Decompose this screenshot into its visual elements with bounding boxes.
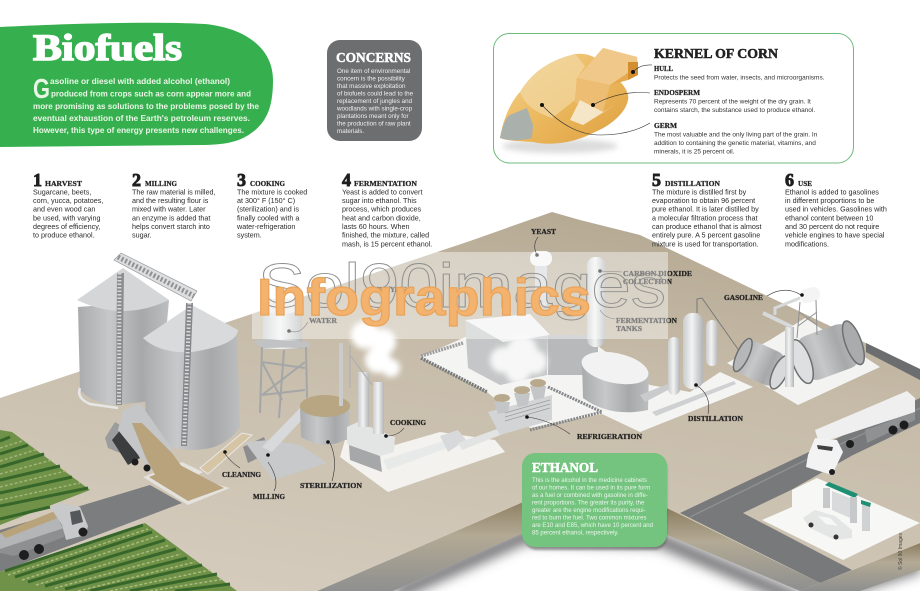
step 4: fermentation: 4 [342,170,351,190]
ground side strata [317,499,920,591]
step 1: harvest: degrees of efficiency, [33,222,100,231]
paved platform: gasoline [727,318,880,405]
title: Biofuels [33,28,182,69]
step 1: harvest: HARVEST [45,180,82,188]
endosperm [654,89,815,114]
milling unit [245,405,327,480]
steam from cooking [351,321,400,377]
road: main road and junction [680,343,920,583]
cooking unit [347,345,395,472]
kernel heading: KERNEL OF CORN [654,47,778,62]
germ: GERM [654,122,677,130]
silo front [143,305,240,450]
germ: The most valuable and the only living part of the grain. In [654,132,818,138]
truck on access road [0,503,88,560]
process labels: TANKS [616,325,642,333]
ethanol text: of our homes. It can be used in its pure form [532,486,650,492]
road: access road at the field [0,485,182,572]
process labels: STERILIZATION [300,482,362,490]
step 2: milling: mixed with water. Later [132,205,206,214]
step 3: cooking: COOKING [250,180,286,188]
ethanol text: as a fuel or combined with gasoline in diffe- [532,493,648,499]
hull: Protects the seed from water, insects, and microorganisms. [654,74,825,82]
step 1: harvest: 1 [33,170,42,190]
process labels: MILLING [253,493,286,501]
step 3: cooking: water-refrigeration [236,222,295,231]
panel: ethanol [522,453,667,550]
refrigeration unit [421,343,602,435]
step 6: use: used in vehicles. Gasolines with [785,205,887,214]
kernel illustration [500,48,638,153]
ground plane [0,212,920,591]
step 5: distillation: The mixture is distilled first by [652,187,747,196]
concerns text: One item of environmental [337,68,410,75]
watermark: Infographics: Infographics [257,269,591,327]
step 4: fermentation: Yeast is added to convert [342,187,422,196]
step 2: milling: The raw material is milled, [132,187,215,196]
watermark: Sol90images: Sol90images [258,252,666,321]
concerns text [336,68,414,135]
step 3: cooking: finally cooled with a [237,213,299,222]
storage tank [579,346,651,412]
distillation columns [640,298,740,416]
step 5: distillation [652,170,761,248]
ethanol text: greater are the engine modifications requi- [532,508,646,514]
step 6: use: Ethanol is added to gasolines [785,187,879,196]
step 3: cooking: 3 [237,170,246,190]
step 3: cooking: (sterilization) and is [237,205,299,214]
step 4: fermentation: sugar into ethanol. This [342,196,417,205]
endosperm: Represents 70 percent of the weight of the dry grain. It [654,98,811,106]
watermark band [252,252,668,339]
step 3: cooking: at 300° F (150° C) [237,196,295,205]
cleaning conveyor [200,433,270,474]
concerns text: plantations meant only for [337,113,409,120]
step 4: fermentation [342,170,432,248]
intro paragraph: However, this type of energy presents new challenges. [33,126,244,135]
concerns text: materials. [337,128,364,135]
step 2: milling: 2 [132,170,141,190]
step 5: distillation: a molecular filtration process that [652,213,757,222]
process labels: DISTILLATION [688,415,743,423]
step 4: fermentation: heat and carbon dioxide, [342,213,421,222]
ground shadow [395,536,920,591]
step 2: milling [132,170,215,240]
step 6: use: modifications. [785,239,829,248]
sterilization vat [300,343,350,445]
concerns text: the production of raw plant [337,120,411,128]
process callout lines and dots [223,237,804,491]
tanker truck [806,391,915,475]
step 4: fermentation: process, which produces [342,205,422,214]
fermentation building [465,314,598,385]
step 2: milling: MILLING [145,180,178,188]
step 5: distillation: can produce ethanol that is almost [652,222,761,231]
field: upper crop rows [0,430,90,525]
concerns text: that massive exploitation [337,83,406,90]
yeast tank and carbon dioxide tank [530,251,605,347]
concerns text: concern is the possibility [337,76,406,82]
hull [654,65,825,82]
process labels: FERMENTATION [616,317,677,325]
ethanol text [532,478,653,536]
ethanol text: rent proportions. The greater its purity, the [532,500,645,506]
car at gas station [803,510,852,540]
step 4: fermentation: mash, is 15 percent ethanol. [342,239,432,248]
step 6: use: vehicle engines to have special [785,231,885,240]
intro paragraph [33,73,259,135]
step 2: milling: helps convert starch into [132,222,210,231]
step 3: cooking [236,170,307,240]
step 5: distillation: entirely pure. A 5 percent gasoline [652,231,760,240]
grain pit [143,462,230,505]
paved platform: sterilization and cooking [340,432,505,492]
process labels: WATER [309,317,338,325]
step 6: use: ethanol content between 10 [785,213,873,222]
dump truck and chute [105,403,190,484]
ethanol heading: ETHANOL [532,461,598,476]
step 5: distillation: pure ethanol. It is later distilled by [652,205,759,214]
intro paragraph: G [33,73,50,104]
panel: concerns [327,40,422,141]
credit: © Sol 90 Images [897,532,904,570]
kernel callouts [540,65,652,135]
step 2: milling: and the resulting flour is [132,196,209,205]
ethanol text: This is the alcohol in the medicine cabinets [532,478,647,484]
germ: minerals, it is 25 percent oil. [654,148,735,156]
process labels: REFRIGERATION [577,433,642,441]
germ: addition to containing the genetic material, vitamins, and [654,140,816,147]
process labels: COLLECTION [623,278,672,286]
paved platform: fermentation and distillation [420,335,753,432]
intro paragraph: asoline or diesel with added alcohol (ethanol) [50,77,230,86]
intro paragraph: eventual exhaustion of the Earth's petroleum reserves. [33,114,250,123]
concerns text: of biofuels could lead to the [337,90,414,98]
title panel [0,23,273,147]
process labels: CLEANING [222,471,262,479]
germ [654,122,818,156]
step 1: harvest: corn, yucca, potatoes, [33,196,103,205]
step 3: cooking: The mixture is cooked [237,187,307,196]
step 6: use: 6 [785,170,794,190]
silo ladders and top conveyor [114,253,197,446]
process labels: COOKING [390,419,427,427]
step 1: harvest [33,170,103,240]
process labels: GASOLINE [724,294,763,302]
silo rear [77,268,169,408]
gas station lot [762,478,920,560]
step 2: milling: an enzyme is added that [132,213,210,222]
step 1: harvest: and even wood can [33,205,95,214]
concerns text: woodlands with single-crop [336,106,413,112]
step 5: distillation: mixture is used for transportation. [652,239,759,248]
step 6: use: USE [798,180,812,188]
ethanol text: red to burn the fuel. Two common mixtures [532,516,646,522]
step 6: use [785,170,887,248]
step 5: distillation: evaporation to obtain 96 percent [652,196,755,205]
endosperm: contains starch, the substance used to produce ethanol. [654,107,815,114]
step 1: harvest: to produce ethanol. [33,231,95,240]
step 6: use: in different proportions to be [785,196,874,205]
field: lower crop rows [0,523,237,591]
concerns heading: CONCERNS [336,51,411,66]
endosperm: ENDOSPERM [654,89,700,97]
concerns text: replacement of jungles and [337,98,413,105]
steam from fermentation [490,335,547,384]
step 2: milling: sugar. [132,231,152,240]
step 6: use: and 30 percent do not require [785,222,879,231]
process labels: CARBON DIOXIDE [623,270,692,278]
process labels: YEAST [531,228,556,236]
gas station [823,482,871,531]
step 3: cooking: system. [237,231,262,240]
step 1: harvest: be used, with varying [33,213,101,222]
gasoline tanks and tower [730,286,869,392]
intro paragraph: more promising as solutions to the problems posed by the [33,102,259,111]
intro paragraph: produced from crops such as corn appear more and [51,90,251,98]
step 4: fermentation: FERMENTATION [354,180,417,188]
step 5: distillation: 5 [652,170,661,190]
water tower [253,298,310,418]
step 5: distillation: DISTILLATION [665,180,720,188]
step 4: fermentation: lasts 60 hours. When [342,222,410,231]
step 4: fermentation: finished, the mixture, called [342,231,429,240]
process labels [222,228,763,501]
panel: kernel of corn [494,34,854,163]
ethanol text: are E10 and E85, which have 10 percent and [532,523,653,529]
step 1: harvest: Sugarcane, beets, [33,187,91,196]
hull: HULL [654,65,673,73]
process labels: ENZYME [375,286,407,294]
ethanol text: 85 percent ethanol, respectively. [532,530,619,536]
transfer pipes [383,428,503,470]
